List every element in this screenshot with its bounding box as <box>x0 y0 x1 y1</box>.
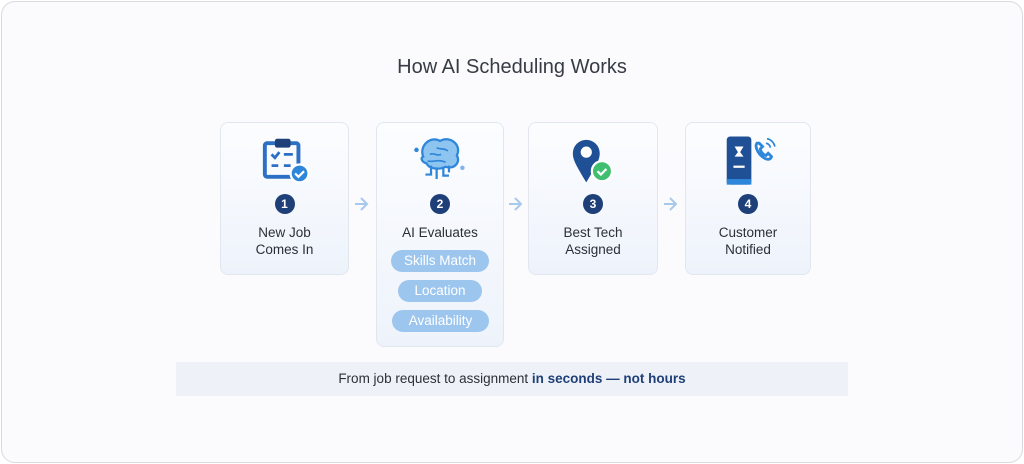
title: How AI Scheduling Works <box>397 56 627 78</box>
bottom band tagline: From job request to assignment in seconds — not hours <box>338 371 686 386</box>
label <box>719 225 778 257</box>
badge 3: 3 <box>590 197 596 211</box>
label: Best Tech <box>563 225 623 240</box>
label: Comes In <box>256 242 313 257</box>
card 3: best tech <box>528 122 658 275</box>
badge 4 <box>738 194 758 214</box>
arrow <box>355 197 368 211</box>
icon: brain <box>414 138 465 179</box>
badge 2: 2 <box>437 197 443 211</box>
card 4: customer notified <box>685 122 811 275</box>
badge 4: 4 <box>745 197 751 211</box>
label: New Job <box>258 225 311 240</box>
pill: location <box>398 280 482 302</box>
label <box>563 225 623 257</box>
bottom band tagline <box>176 362 848 396</box>
badge 1: 1 <box>281 197 288 211</box>
badge 1 <box>274 194 294 214</box>
pill: skills: Skills Match <box>404 253 476 268</box>
badge 3 <box>583 194 603 214</box>
label <box>256 225 313 257</box>
card 1: new job <box>220 122 349 275</box>
icon: pin <box>572 140 611 182</box>
pill: availability <box>392 310 489 332</box>
label: AI Evaluates <box>402 225 478 240</box>
icon: clipboard <box>262 138 308 184</box>
pill: location: Location <box>414 283 466 298</box>
badge 2 <box>430 194 450 214</box>
icon: phone <box>726 136 776 185</box>
pill: availability: Availability <box>409 313 472 328</box>
label: Notified <box>725 242 771 257</box>
arrow <box>664 197 678 211</box>
label: Customer <box>719 225 777 240</box>
card 2: AI evaluates <box>376 122 504 347</box>
pill: skills <box>391 250 489 272</box>
label: Assigned <box>565 242 621 257</box>
arrow <box>509 197 522 211</box>
